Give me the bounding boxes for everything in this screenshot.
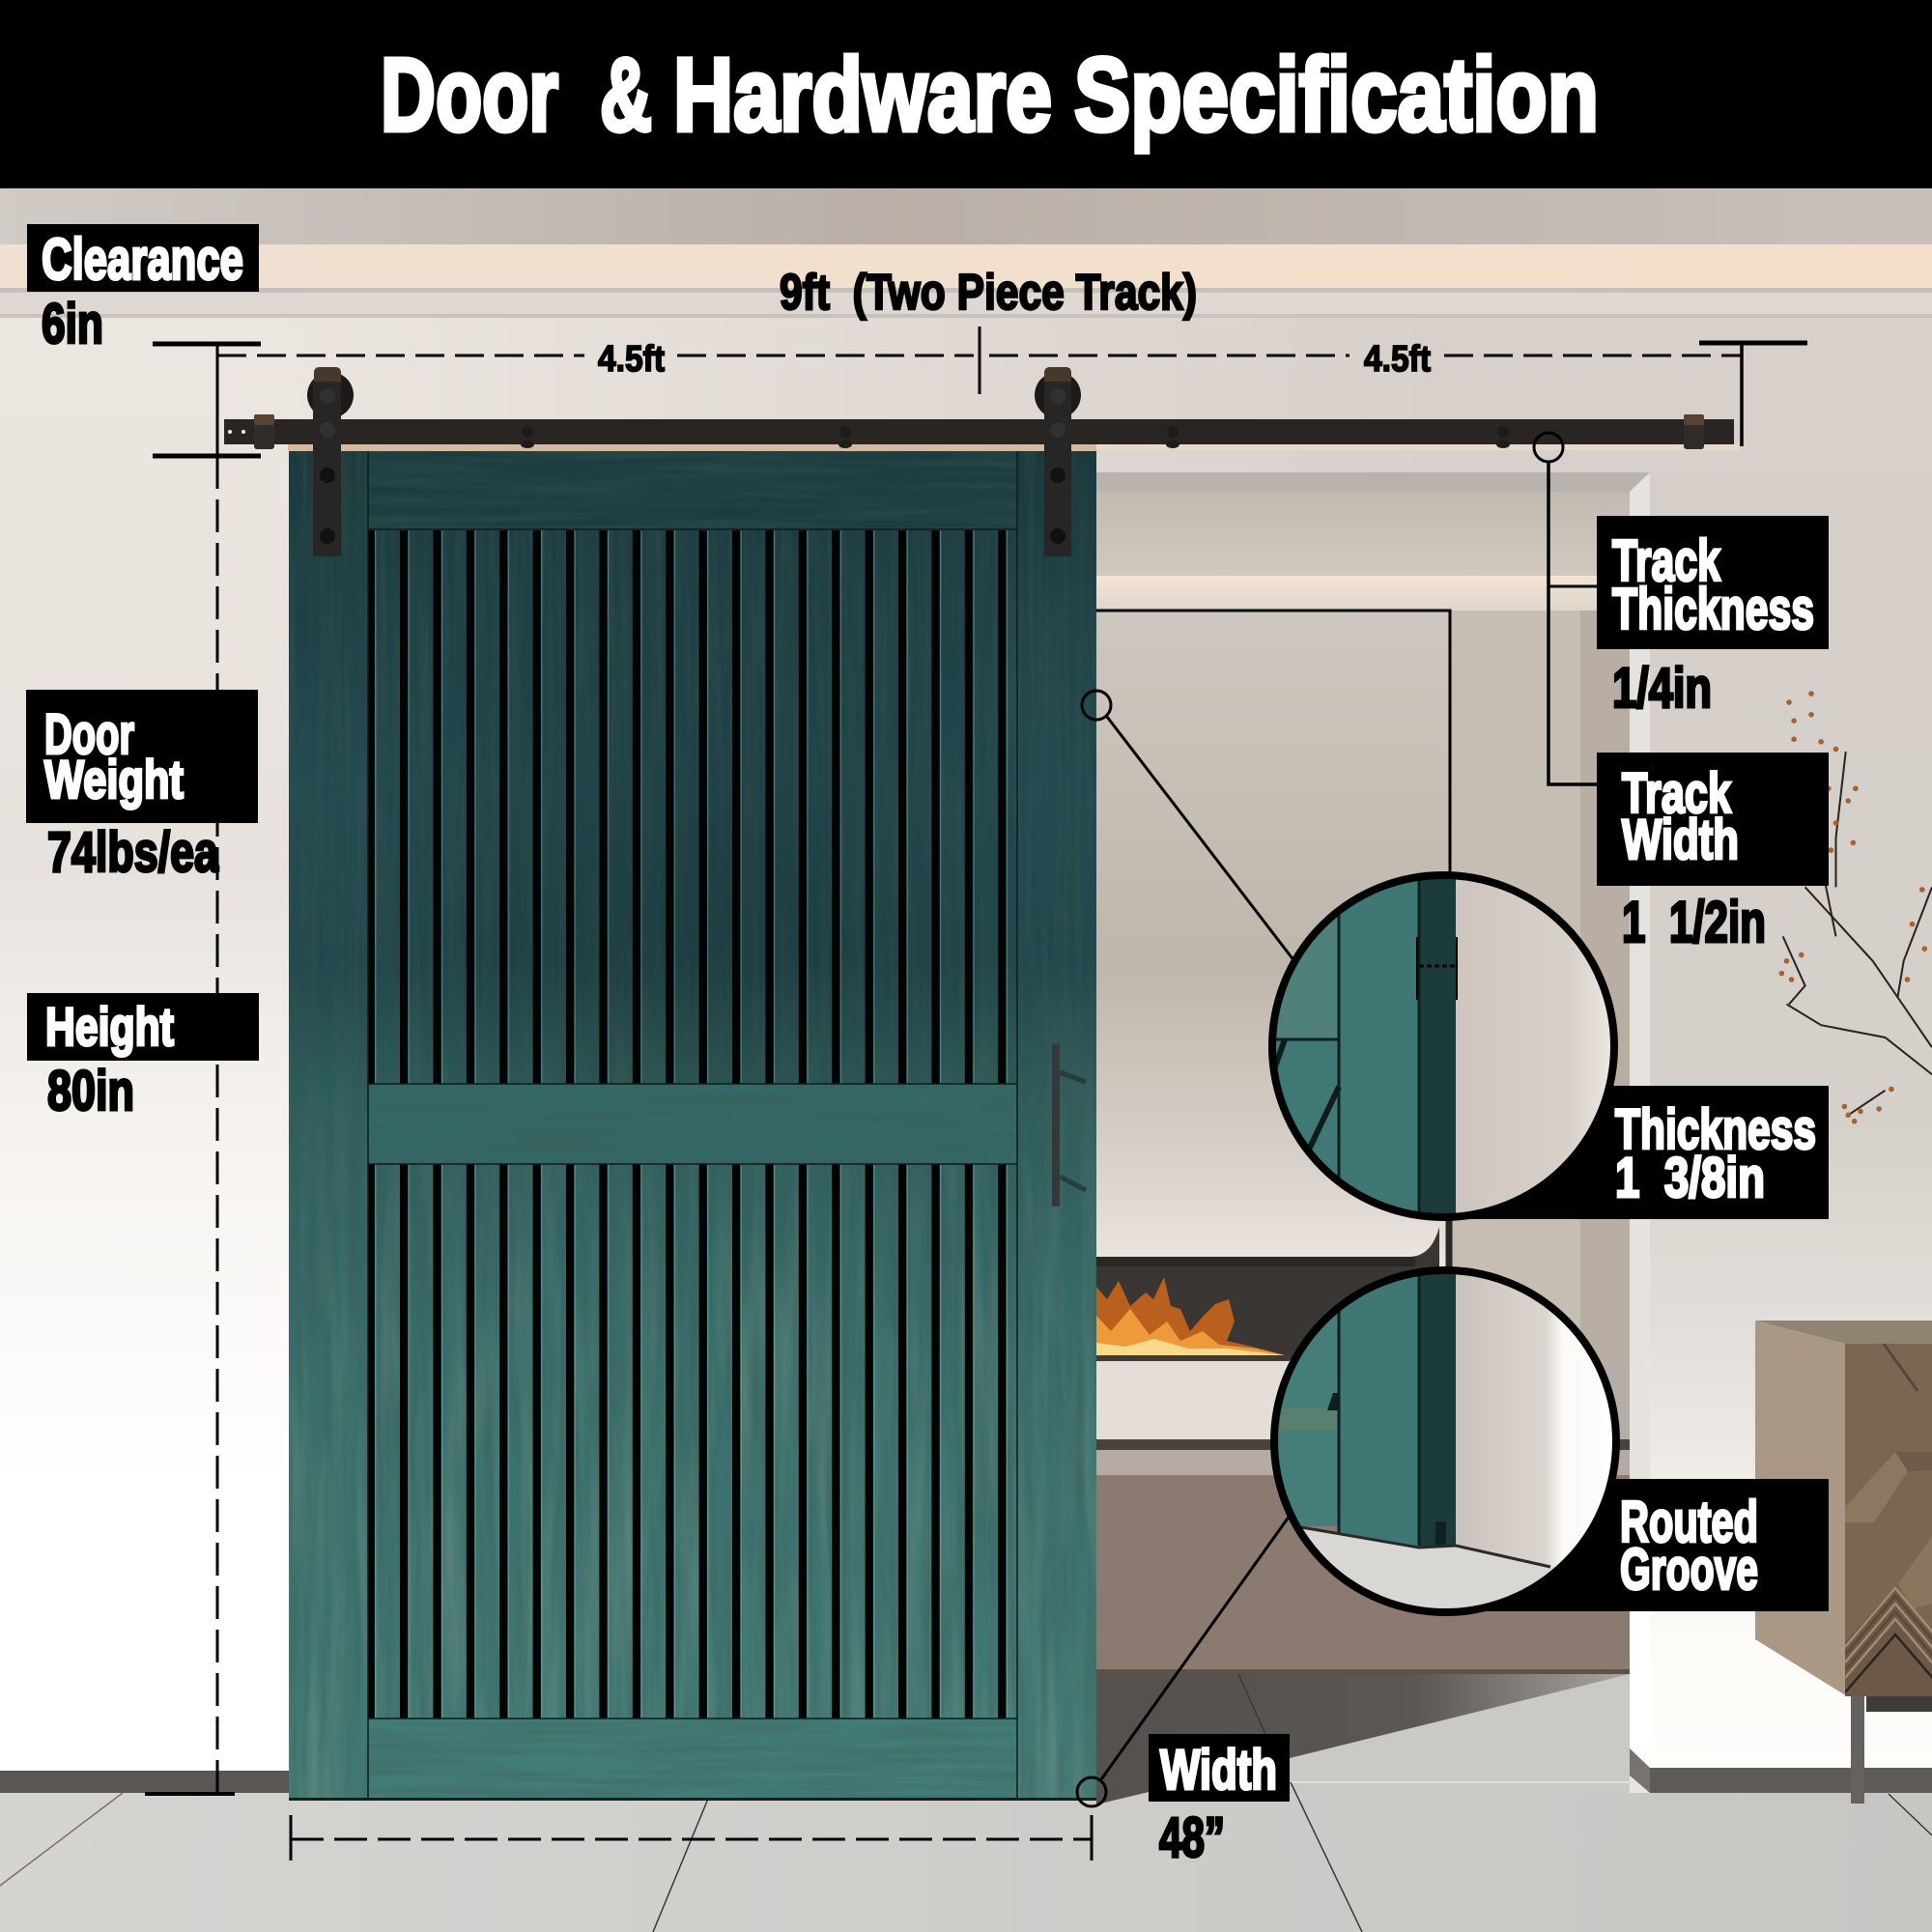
small callout markers [1077,433,1563,1806]
title bar [0,0,1932,188]
label: right 4.5ft: 4.5ft [1364,339,1431,380]
label: height [27,993,259,1122]
text: thickness: 1 3/8in [1615,1147,1765,1209]
title: Specification [1074,36,1599,153]
label: track width: Width [1622,809,1739,871]
door rail grain middle [368,1084,1017,1164]
cabinet [1755,1321,1932,1804]
fireplace with flames [1096,1227,1630,1674]
track stop left [254,414,274,449]
label: clearance: Clearance [42,227,243,292]
label: track thickness: Track [1612,528,1720,593]
title [381,36,1599,153]
floor shadow and tile seams [0,1674,1932,1932]
door bottom edge [289,1798,1096,1801]
detail circle: door thickness [1265,869,1620,1227]
left hanger [307,367,354,556]
text: routed groove: Groove [1620,1537,1758,1602]
door slats lower [368,1164,1017,1719]
label: track width [1597,753,1829,954]
label: door weight: Door [44,703,134,766]
label: height: 80in [47,1060,134,1122]
label: door weight: Weight [44,749,184,810]
plant branches with berries [1779,691,1932,1124]
door rail grain bottom [368,1719,1017,1798]
label: left 4.5ft: 4.5ft [598,339,665,380]
door width dimension line [291,1815,1092,1861]
leader lines [1096,462,1597,1779]
right hanger [1035,367,1081,556]
label: routed groove box [1449,1479,1829,1611]
text: routed groove: Routed [1620,1490,1758,1554]
label: track width: Track [1622,762,1732,825]
door frame edges [368,451,1017,1799]
track bolts [521,426,1510,448]
door top rail [368,451,1017,529]
label: width: Width [1160,1739,1277,1802]
door green tint [289,1138,1096,1798]
label: width [1149,1734,1290,1869]
door wood grain vertical [289,451,1096,1799]
label: nine foot track: 9ft (Two Piece Track) [780,265,1197,321]
label: clearance: 6in [42,293,103,355]
label: track thickness: 1/4in [1612,657,1712,720]
track rail [224,414,1739,451]
text: thickness [1615,1098,1816,1209]
label: width: 48” [1159,1806,1225,1869]
text: thickness: Thickness [1615,1098,1816,1161]
clearance and height dimension lines [145,344,261,1795]
door bottom rail [368,1719,1017,1798]
label: height: Height [45,996,174,1057]
door shading [368,530,1017,1084]
door middle rail [368,1084,1017,1164]
label: track thickness: Thickness [1612,577,1814,641]
detail circle: routed groove [1265,1265,1623,1623]
label: clearance [27,224,259,355]
handle [1052,1043,1086,1207]
text: routed groove [1620,1490,1758,1602]
door rail grain top [368,451,1017,529]
label: thickness box [1449,1086,1829,1219]
track stop right [1684,414,1704,449]
door slats upper [368,530,1017,1084]
label: track thickness [1597,516,1829,720]
label: door weight [26,690,258,884]
title: & [600,36,652,153]
label: door weight: 74lbs/ea [47,821,219,884]
label: track width: 1 1/2in [1622,890,1766,954]
title: Door [381,36,558,153]
barn door [289,451,1096,1801]
title: Hardware [673,36,1052,153]
track length dimension lines [217,327,1807,446]
